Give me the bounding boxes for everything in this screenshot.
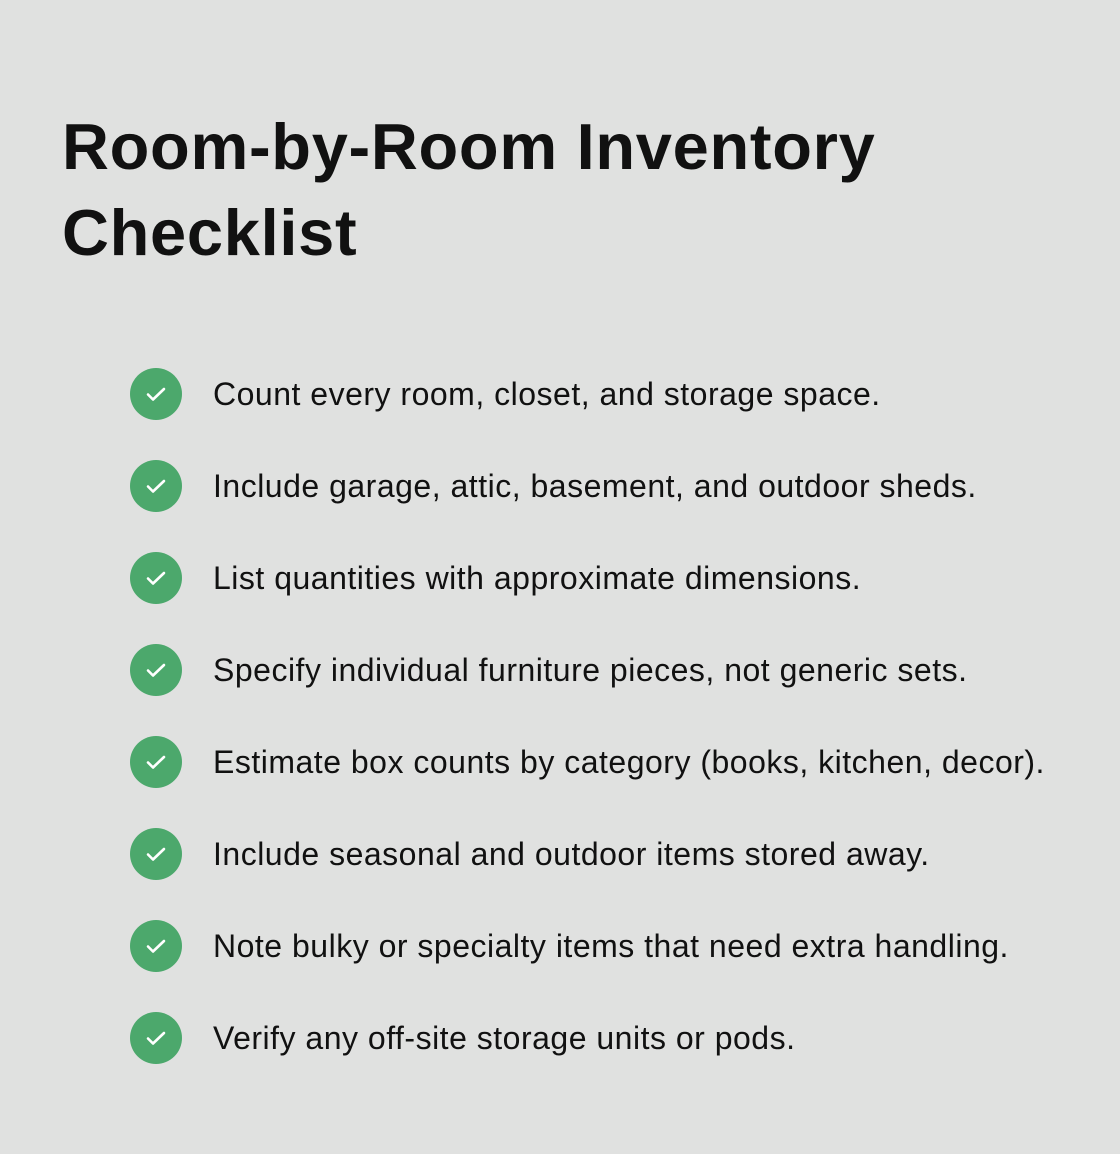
item 4: [130, 644, 968, 696]
checklist: [130, 368, 1045, 1064]
item 8: Verify any off-site storage units or pods.: [213, 1020, 795, 1056]
item 3: List quantities with approximate dimensions.: [213, 560, 861, 596]
item 7: Note bulky or specialty items that need extra handling.: [213, 928, 1009, 964]
item 5: Estimate box counts by category (books, kitchen, decor).: [213, 744, 1045, 780]
item 1: Count every room, closet, and storage space.: [213, 376, 881, 412]
item 6: Include seasonal and outdoor items stored away.: [213, 836, 930, 872]
title: [62, 110, 875, 269]
item 6: [130, 828, 930, 880]
title: Room-by-Room Inventory: [62, 110, 875, 183]
item 8: [130, 1012, 795, 1064]
item 1: [130, 368, 881, 420]
item 2: Include garage, attic, basement, and outdoor sheds.: [213, 468, 977, 504]
item 5: [130, 736, 1045, 788]
item 4: Specify individual furniture pieces, not generic sets.: [213, 652, 968, 688]
item 2: [130, 460, 977, 512]
item 3: [130, 552, 861, 604]
item 7: [130, 920, 1009, 972]
title: Checklist: [62, 196, 357, 269]
